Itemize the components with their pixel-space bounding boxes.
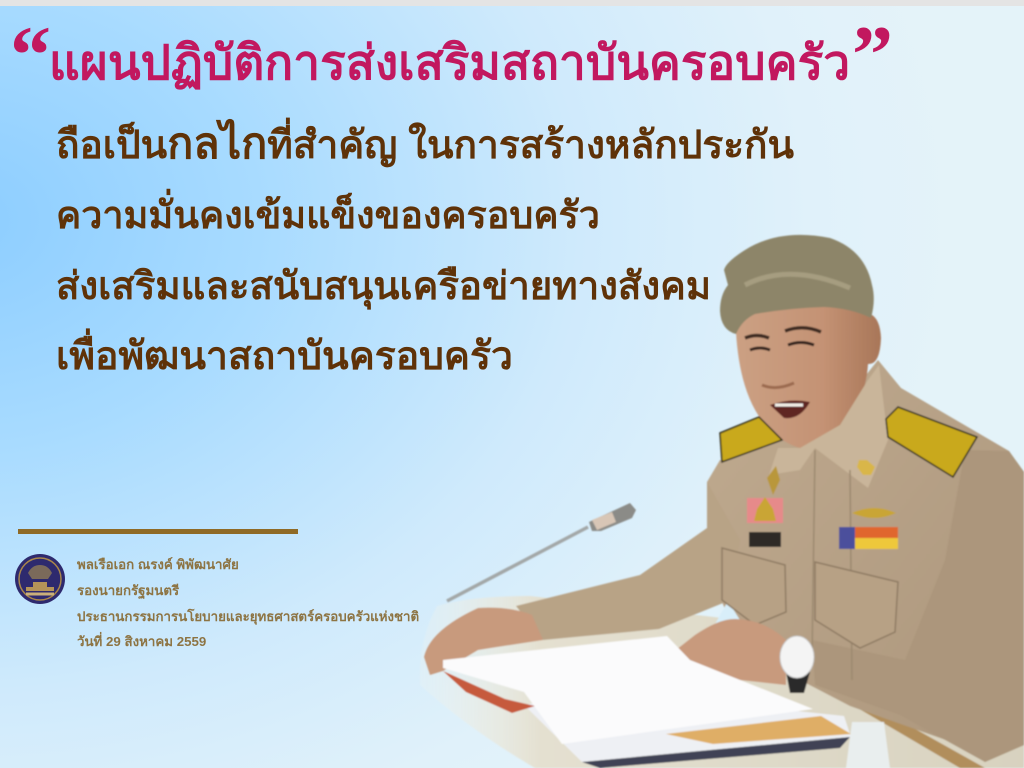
divider bar (18, 529, 298, 534)
wristwatch (780, 636, 814, 693)
table (420, 596, 1024, 768)
epaulettes (720, 407, 977, 477)
gap between arm and body (714, 601, 745, 628)
head (720, 235, 881, 448)
left arm sleeve (516, 482, 740, 640)
water glass (846, 722, 890, 768)
body line 4: เพื่อพัฒนาสถาบันครอบครัว (56, 335, 513, 378)
top browser strip (0, 0, 1024, 6)
title: แผนปฏิบัติการส่งเสริมสถาบันครอบครัว (49, 37, 850, 90)
chair role: ประธานกรรมการนโยบายและยุทธศาสตร์ครอบครัวแห่งชาติ (77, 609, 419, 624)
shirt placket (812, 450, 852, 680)
body line 2: ความมั่นคงเข้มแข็งของครอบครัว (56, 194, 600, 236)
body line 3: ส่งเสริมและสนับสนุนเครือข่ายทางสังคม (56, 265, 711, 308)
icon: government seal (15, 554, 65, 604)
closing quotation mark: ” (852, 9, 893, 100)
name: พลเรือเอก ณรงค์ พิพัฒนาศัย (77, 557, 239, 572)
right arm sleeve (812, 450, 1024, 762)
date: วันที่ 29 สิงหาคม 2559 (77, 634, 206, 649)
microphone (447, 503, 636, 601)
collar (769, 365, 888, 488)
signature block (77, 557, 419, 649)
body text block (56, 118, 794, 378)
body line 1: ถือเป็นกลไกที่สำคัญ ในการสร้างหลักประกัน (56, 120, 794, 168)
badges and ribbons (747, 460, 898, 549)
hands (424, 608, 786, 685)
torso and shirt (707, 360, 1024, 762)
shirt pockets (722, 548, 898, 648)
position: รองนายกรัฐมนตรี (77, 583, 179, 598)
opening quotation mark: “ (10, 9, 51, 100)
papers on desk (443, 636, 851, 768)
